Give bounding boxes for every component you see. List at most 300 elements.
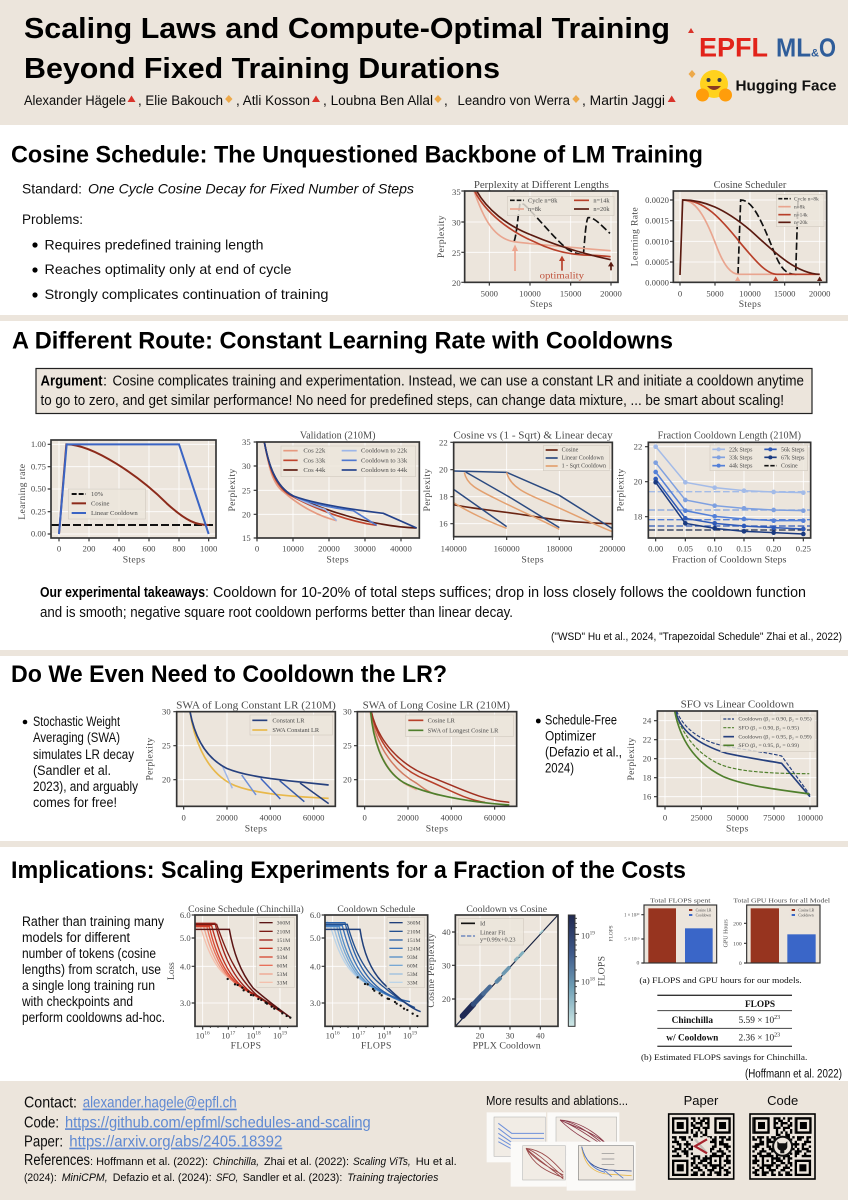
chart: SFO vs linear cooldown: 100000 [797, 812, 823, 822]
chart: learning rate schedules: 0.50 [31, 484, 46, 494]
contact and links: Paper: [24, 1134, 63, 1151]
chart: SFO vs linear cooldown: 50000 [727, 812, 748, 822]
chart: cosine vs sqrt and linear decay [422, 431, 625, 565]
chart: cooldown vs cosine scatter: PPLX Cooldown [473, 1041, 541, 1052]
divider band 2 [0, 650, 848, 656]
chart: perplexity at different lengths: 20000 [600, 288, 622, 298]
text block: problems: Reaches optimality only at end of cycle [44, 261, 292, 277]
caption and FLOPS table: (b) Estimated FLOPS savings for Chinchilla. [641, 1053, 807, 1062]
references: Scaling ViTs, [353, 1156, 411, 1168]
legend [721, 715, 815, 752]
references: MiniCPM, [62, 1172, 108, 1184]
chart: SWA of long cosine LR: 25 [343, 741, 352, 751]
references: Zhai et al. (2022): [264, 1156, 349, 1168]
chart: SWA of long cosine LR: 40000 [441, 812, 462, 822]
legend: Cosine LR [798, 908, 815, 912]
legend: n=8k [794, 204, 805, 210]
chart: validation 210M: Perplexity [227, 468, 238, 512]
chart: validation 210M: 40000 [390, 543, 412, 553]
QR code: code [750, 1093, 815, 1179]
references: Defazio et al. (2024): [113, 1172, 212, 1184]
text block: schedule-free optimizer: Optimizer [545, 728, 596, 743]
chart: learning rate schedules: Steps [123, 554, 145, 565]
chart: cosine schedule Chinchilla: 10 [247, 1030, 255, 1040]
bar chart: total GPU hours: Total GPU Hours for all Model [733, 897, 830, 904]
contact and links: Code: [24, 1114, 59, 1131]
chart: SFO vs linear cooldown: 24 [643, 716, 652, 726]
chart: SWA of long cosine LR: Steps [426, 824, 448, 835]
chart: cooldown schedule: 18 [386, 1031, 392, 1037]
divider band 1 [0, 315, 848, 321]
chart: cosine schedule Chinchilla: 10 [273, 1030, 282, 1040]
chart: cosine vs sqrt and linear decay: 20 [439, 465, 448, 475]
chart: learning rate schedules: Learning rate [17, 464, 28, 520]
panel: do we need to cooldown [11, 661, 823, 835]
bar chart: total FLOPS spent: FLOPS [609, 925, 615, 941]
chart: cooldown vs cosine scatter [426, 905, 558, 1052]
chart: fraction cooldown length: 0.20 [766, 543, 781, 553]
contact and links: alexander.hagele@epfl.ch [83, 1095, 237, 1112]
author list: , Atli Kosson [236, 93, 310, 108]
chart: validation 210M: 20000 [318, 543, 340, 553]
legend [789, 907, 818, 918]
Chinchilla points [226, 978, 291, 1019]
chart: validation 210M: 20 [242, 509, 251, 519]
legend: 60M [407, 963, 418, 969]
chart: fraction cooldown length: Fraction of Cooldown Steps [672, 554, 787, 565]
chart: cosine scheduler: 0.0010 [645, 236, 669, 246]
chart: SFO vs linear cooldown: 0 [663, 812, 667, 822]
text block: schedule-free optimizer: 2024) [545, 760, 574, 775]
legend: 33k Steps [729, 455, 753, 461]
logo: Hugging Face [688, 70, 836, 102]
chart: learning rate schedules: 0 [57, 543, 61, 553]
bar chart: total FLOPS spent: 1 × 10²⁰ [624, 912, 639, 918]
callout: argument [36, 368, 812, 414]
chart: cosine vs sqrt and linear decay: Steps [521, 554, 544, 565]
chart: SWA of long constant LR: 0 [182, 812, 186, 822]
legend: SFO (β₁ = 0.95, β₂ = 0.99) [738, 744, 799, 749]
legend: Cosine [562, 448, 579, 454]
chart: learning rate schedules: 400 [113, 543, 125, 553]
chart: validation 210M [227, 430, 419, 565]
chart: perplexity at different lengths: 10000 [519, 288, 541, 298]
chart: cosine vs sqrt and linear decay: 140000 [441, 543, 467, 553]
author list: Alexander Hägele [24, 93, 126, 108]
text block: rather than training many models: perform cooldowns ad-hoc. [22, 1010, 165, 1025]
references: SFO, [216, 1172, 238, 1184]
chart: validation 210M: 35 [242, 437, 251, 447]
optimality arrows: optimality [540, 271, 584, 281]
legend: Cycle n=8k [794, 196, 819, 202]
legend: 1 - Sqrt Cooldown [562, 464, 606, 470]
chart: cosine schedule Chinchilla: 17 [230, 1031, 236, 1037]
text block: problems: Problems: [22, 211, 83, 227]
chart: SFO vs linear cooldown: 75000 [763, 812, 785, 822]
table: estimated FLOPS savings: 23 [774, 1015, 780, 1021]
text block: stochastic weight averaging [23, 714, 138, 810]
legend: Cosine [91, 500, 110, 507]
text block: experimental takeaways: and is smooth; negative square root cooldown performs better than linear decay. [40, 605, 513, 621]
chart: cosine schedule Chinchilla: FLOPS [231, 1041, 261, 1052]
colorbar: FLOPS: 10 [581, 930, 590, 940]
text block: rather than training many models: with checkpoints and [21, 994, 133, 1009]
legend [776, 194, 824, 227]
chart: perplexity at different lengths: 30 [452, 218, 461, 228]
chart: SWA of long cosine LR: 20000 [397, 812, 419, 822]
optimality arrows [512, 244, 614, 281]
chart: cooldown schedule: 4.0 [310, 961, 321, 971]
chart: cosine schedule Chinchilla: 16 [204, 1031, 210, 1037]
chart: fraction cooldown length: Fraction Cooldown Length (210M) [658, 431, 801, 442]
chart: cosine vs sqrt and linear decay: 16 [439, 519, 448, 529]
chart: cooldown schedule: 16 [334, 1031, 340, 1037]
panel: footer [0, 1081, 848, 1200]
bar chart: total GPU hours: 100 [733, 941, 742, 947]
chart: validation 210M: 0 [255, 543, 259, 553]
chart: cooldown vs cosine scatter: 30 [442, 960, 451, 970]
author list: , Martin Jaggi [582, 93, 665, 108]
legend: Cosine LR [696, 908, 712, 912]
chart: perplexity at different lengths: Perplexity at Different Lengths [474, 180, 609, 191]
text block: rather than training many models: a single long training run [22, 978, 155, 993]
references: References [24, 1152, 90, 1169]
chart: cosine vs sqrt and linear decay: 180000 [546, 543, 572, 553]
legend: SWA of Longest Cosine LR [428, 727, 499, 734]
legend [68, 489, 146, 519]
chart: fraction cooldown length [615, 431, 811, 565]
chart: cooldown schedule: 10 [403, 1030, 412, 1040]
legend: 93M [407, 955, 418, 961]
references: (2024): [24, 1172, 57, 1184]
chart: cosine schedule Chinchilla: Cosine Schedule (Chinchilla) [188, 904, 304, 915]
chart: cooldown schedule: Cooldown Schedule [337, 905, 415, 915]
references: Chinchilla, [213, 1156, 259, 1168]
chart: SFO vs linear cooldown: Perplexity [626, 737, 637, 781]
text block: rather than training many models: Rather than training many [22, 914, 164, 929]
chart: learning rate schedules: 1.00 [31, 439, 46, 449]
optimality arrows [735, 276, 822, 281]
legend: 93M [277, 955, 287, 961]
text block: schedule-free optimizer: Schedule-Free [545, 712, 617, 727]
bar chart: total GPU hours: GPU Hours [723, 919, 729, 947]
chart: cosine vs sqrt and linear decay: 18 [439, 492, 448, 502]
chart: cosine scheduler: Steps [739, 299, 761, 310]
legend [543, 446, 609, 471]
legend: Linear Cooldown [562, 456, 604, 462]
legend: 53M [407, 972, 418, 978]
chart: fraction cooldown length: Perplexity [615, 468, 626, 512]
legend: SFO (β₁ = 0.90, β₂ = 0.95) [738, 726, 799, 731]
chart: cooldown schedule: 19 [412, 1031, 417, 1037]
chart: SFO vs linear cooldown: Steps [726, 824, 749, 835]
QR code: code: Code [767, 1093, 798, 1108]
legend: Cosine [781, 464, 798, 470]
text block: rather than training many models [21, 914, 165, 1025]
chart: cooldown vs cosine scatter: 30 [506, 1030, 514, 1040]
chart: cosine vs sqrt and linear decay: 200000 [599, 543, 625, 553]
legend: Cooldown [798, 913, 814, 917]
chart: perplexity at different lengths: 35 [452, 187, 461, 197]
chart: cosine scheduler: 0 [678, 288, 682, 298]
legend: 210M [277, 929, 290, 935]
legend [257, 918, 294, 988]
text block: stochastic weight averaging: comes for free! [33, 795, 117, 810]
panel: different route [12, 327, 842, 643]
legend: Cos 44k [303, 467, 326, 474]
chart: cosine scheduler: 10000 [739, 288, 761, 298]
contact and links: Contact: [24, 1095, 77, 1112]
chart: learning rate schedules: 600 [143, 543, 155, 553]
bar chart: total FLOPS spent: 5 × 10¹⁹ [624, 937, 640, 943]
callout: argument: to go to zero, and get similar performance! No need for predefined steps, can change data mixture, ... be smart about scaling! [40, 393, 784, 409]
chart: learning rate schedules: 800 [173, 543, 185, 553]
chart: SWA of long constant LR: Perplexity [144, 737, 155, 781]
table: estimated FLOPS savings: FLOPS [745, 1000, 775, 1010]
colorbar: FLOPS: 19 [590, 931, 595, 937]
references [24, 1152, 457, 1184]
legend: Cooldown to 22k [361, 448, 408, 455]
references: Training trajectories [347, 1172, 439, 1184]
panel: cosine schedule [11, 142, 830, 310]
text block: stochastic weight averaging: 2023), and arguably [33, 779, 138, 794]
chart: cooldown schedule: FLOPS [361, 1041, 392, 1052]
text block: stochastic weight averaging: simulates LR decay [33, 747, 134, 762]
chart: cosine scheduler: 15000 [774, 288, 795, 298]
logo: EPFL ML&O: EPFL [699, 32, 768, 62]
text block: rather than training many models: models for different [22, 930, 130, 945]
legend [507, 196, 614, 216]
chart: cosine schedule Chinchilla: 6.0 [180, 910, 191, 920]
legend: 210M [407, 929, 421, 935]
chart: SFO vs linear cooldown: 16 [643, 792, 652, 802]
chart: SWA of long cosine LR: 20 [343, 775, 352, 785]
chart: cooldown schedule: 10 [377, 1030, 386, 1040]
chart: perplexity at different lengths: Perplexity [436, 215, 447, 258]
bar chart: total GPU hours: 0 [739, 961, 742, 967]
chart: cosine schedule Chinchilla: 19 [282, 1031, 287, 1037]
chart: cosine scheduler: 0.0005 [645, 257, 669, 267]
chart: perplexity at different lengths: 25 [452, 248, 461, 258]
chart: SFO vs linear cooldown: 20 [643, 754, 651, 764]
text block: schedule-free optimizer: (Defazio et al., [545, 745, 622, 760]
callout: argument: Argument [40, 374, 103, 390]
chart: validation 210M: 30 [242, 461, 251, 471]
text block: problems [22, 211, 328, 302]
chart: validation 210M: 15 [242, 533, 251, 543]
chart: cooldown vs cosine scatter: 20 [442, 994, 451, 1004]
chart: learning rate schedules [17, 439, 217, 565]
author list: Leandro von Werra [458, 93, 570, 108]
legend: Linear Fit [480, 929, 505, 936]
logo: EPFL ML&O: O [819, 32, 836, 62]
legend: 124M [277, 946, 290, 952]
chart: SFO vs linear cooldown: 18 [643, 773, 651, 783]
chart: fraction cooldown length: 0.05 [678, 543, 693, 553]
bar chart: total FLOPS spent: Total FLOPS spent [650, 897, 711, 904]
legend: Cooldown (β₁ = 0.95, β₂ = 0.99) [738, 735, 812, 740]
divider band 3 [0, 841, 848, 847]
QR code: paper: Paper [684, 1093, 719, 1108]
chart: SWA of long cosine LR: 30 [343, 707, 352, 717]
legend: 33M [277, 980, 287, 986]
text block: standard: One Cycle Cosine Decay for Fixed Number of Steps [88, 180, 414, 196]
text block: experimental takeaways: Our experimental takeaways [40, 585, 205, 601]
contact and links: https://arxiv.org/abs/2405.18392 [69, 1134, 282, 1151]
panel: header [0, 0, 848, 125]
legend: y=0.99x+0.23 [480, 936, 516, 943]
chart: cooldown vs cosine scatter: 40 [442, 927, 451, 937]
chart: learning rate schedules: 0.75 [31, 461, 46, 471]
chart: perplexity at different lengths: Steps [530, 299, 553, 310]
chart: SFO vs linear cooldown [626, 700, 823, 835]
legend [250, 715, 332, 735]
logo: EPFL ML&O [688, 28, 836, 62]
chart: SWA of long cosine LR [343, 701, 517, 835]
legend: SWA Constant LR [272, 727, 320, 734]
text block: rather than training many models: lengths) from scratch, use [22, 962, 161, 977]
legend: 56k Steps [781, 447, 805, 453]
legend [710, 445, 808, 471]
chart: fraction cooldown length: 0.00 [648, 543, 663, 553]
chart: cosine vs sqrt and linear decay: Cosine vs (1 - Sqrt) & Linear decay [453, 431, 613, 442]
legend: n=14k [794, 212, 808, 218]
chart: cosine scheduler [629, 180, 830, 310]
legend: n=8k [528, 206, 542, 213]
legend: Constant LR [272, 717, 305, 724]
colorbar: FLOPS: 18 [590, 977, 595, 983]
table: estimated FLOPS savings: 23 [774, 1033, 780, 1039]
text block: standard: Standard: [22, 180, 82, 196]
chart: cooldown schedule: 17 [360, 1031, 366, 1037]
legend: 53M [277, 972, 287, 978]
callout: argument: Cosine complicates training and experimentation. Instead, we can use a constant LR and initiate a cooldown anytime [112, 374, 804, 390]
data points [653, 444, 806, 536]
logo: EPFL ML&O: ML [776, 32, 811, 62]
chart: cosine vs sqrt and linear decay: Perplexity [422, 468, 433, 512]
chart: SWA of long constant LR: 60000 [303, 812, 324, 822]
colorbar: FLOPS: FLOPS [596, 956, 607, 986]
title: Beyond Fixed Training Durations [24, 53, 500, 85]
chart: SWA of long constant LR: 20 [162, 775, 171, 785]
chart: validation 210M: 25 [242, 485, 251, 495]
legend: 124M [407, 946, 421, 952]
chart: learning rate schedules: 0.00 [31, 529, 46, 539]
chart: cosine scheduler: 0.0020 [645, 195, 669, 205]
legend: Cycle n=8k [528, 197, 558, 204]
more results thumbnails [486, 1093, 636, 1191]
table: estimated FLOPS savings: w/ Cooldown [666, 1034, 719, 1044]
author list: , [444, 93, 448, 108]
bar chart: total GPU hours [723, 897, 830, 967]
text block: stochastic weight averaging: Averaging (SWA) [33, 730, 120, 745]
chart: cooldown schedule: 5.0 [310, 933, 321, 943]
table: estimated FLOPS savings [657, 995, 792, 1046]
title: Scaling Laws and Compute-Optimal Training [24, 13, 670, 45]
legend: Cooldown to 33k [361, 457, 408, 464]
bar chart: total FLOPS spent [609, 897, 717, 967]
chart: fraction cooldown length: 22 [634, 442, 642, 452]
bar chart: total GPU hours: 200 [733, 921, 742, 927]
heading: cooldown question: Do We Even Need to Cooldown the LR? [11, 661, 447, 688]
legend: Cooldown (β₁ = 0.90, β₂ = 0.95) [738, 718, 812, 723]
chart: cosine schedule Chinchilla: 4.0 [180, 961, 191, 971]
chart: validation 210M: Validation (210M) [300, 430, 375, 441]
text block: problems: Requires predefined training length [44, 236, 264, 252]
legend: 33M [407, 980, 418, 986]
chart: validation 210M: Steps [326, 554, 349, 565]
chart: learning rate schedules: 0.25 [31, 506, 46, 516]
chart: perplexity at different lengths: 15000 [560, 288, 581, 298]
chart: SWA of long cosine LR: 0 [363, 812, 367, 822]
caption and FLOPS table: (a) FLOPS and GPU hours for our models. [639, 976, 802, 985]
text block: schedule-free optimizer [536, 712, 622, 775]
chart: SWA of long constant LR [144, 701, 336, 835]
chart: cosine schedule Chinchilla: 5.0 [180, 933, 191, 943]
chart: SWA of long constant LR: 20000 [216, 812, 238, 822]
legend: Cos 22k [303, 448, 326, 455]
panel: implications [11, 857, 842, 1080]
legend: Cos 33k [303, 457, 326, 464]
legend: 44k Steps [729, 464, 753, 470]
chart: cosine scheduler: 0.0000 [645, 278, 669, 288]
references: Sandler et al. (2023): [243, 1172, 342, 1184]
chart: cosine vs sqrt and linear decay: 22 [439, 437, 448, 447]
text block: problems: Strongly complicates continuation of training [44, 286, 328, 302]
legend [687, 907, 715, 918]
chart: SWA of long constant LR: Steps [245, 824, 267, 835]
legend: 360M [407, 921, 421, 927]
callout: argument: : [103, 374, 107, 390]
table: estimated FLOPS savings: Chinchilla [672, 1016, 713, 1026]
chart: SWA of long constant LR: SWA of Long Constant LR (210M) [176, 701, 336, 712]
chart: SWA of long constant LR: 30 [162, 707, 171, 717]
chart: cooldown vs cosine scatter: Cooldown vs Cosine [466, 905, 547, 915]
legend: 151M [407, 938, 421, 944]
legend: n=20k [593, 206, 610, 213]
chart: cosine scheduler: Learning Rate [629, 207, 640, 266]
legend [458, 918, 523, 945]
chart: perplexity at different lengths [436, 180, 622, 310]
references: Hu et al. [416, 1156, 457, 1168]
chart: fraction cooldown length: 18 [634, 512, 642, 522]
contact and links: https://github.com/epfml/schedules-and-scaling [65, 1114, 371, 1131]
table: estimated FLOPS savings: 2.36 × 10 [739, 1034, 774, 1044]
legend: 151M [277, 938, 290, 944]
more results thumbnails: More results and ablations... [486, 1093, 628, 1108]
chart: fraction cooldown length: 0.10 [707, 543, 722, 553]
legend: n=14k [593, 197, 610, 204]
chart: perplexity at different lengths: 5000 [481, 288, 498, 298]
legend: 360M [277, 921, 290, 927]
legend: 22k Steps [729, 447, 753, 453]
text block: stochastic weight averaging: (Sandler et al. [33, 763, 111, 778]
chart: cooldown schedule: 10 [326, 1030, 334, 1040]
legend: n=20k [794, 220, 808, 226]
text block: experimental takeaways [40, 585, 806, 621]
author list: , Elie Bakouch [138, 93, 223, 108]
chart: cosine schedule Chinchilla: 18 [255, 1031, 261, 1037]
chart: SFO vs linear cooldown: 25000 [691, 812, 712, 822]
chart: cosine schedule Chinchilla: 10 [196, 1030, 204, 1040]
chart: cosine scheduler: 5000 [706, 288, 724, 298]
colorbar: FLOPS: 10 [581, 976, 590, 986]
colorbar: FLOPS [568, 915, 607, 1026]
text block: rather than training many models: number of tokens (cosine [22, 946, 156, 961]
chart: cosine scheduler: 0.0015 [645, 216, 669, 226]
legend: Cosine LR [428, 717, 456, 724]
references: : Hoffmann et al. (2022): [90, 1156, 208, 1168]
